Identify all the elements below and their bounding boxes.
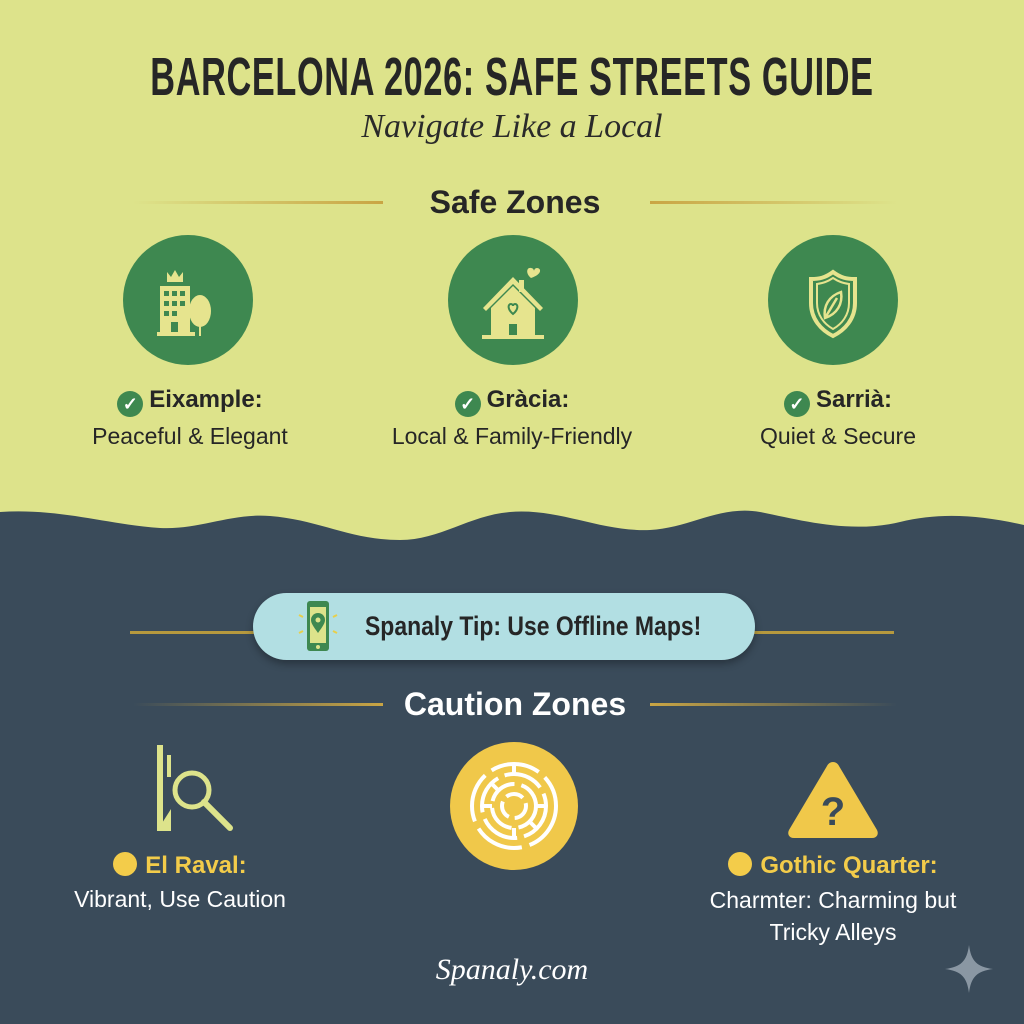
heading: caution zones: Caution Zones [404, 686, 626, 722]
icon: warning [788, 762, 878, 838]
icon: sparkle [946, 946, 992, 992]
safe zone: Sarria: ✓ [789, 394, 805, 414]
heading: safe zones [162, 184, 868, 220]
caution zone: Gothic Quarter: Charmter: Charming but [710, 887, 956, 913]
caution zone: El Raval [74, 852, 286, 912]
safe zone: Eixample: ✓ [123, 394, 138, 414]
safe zone: Eixample: Eixample: [149, 386, 263, 413]
safe zone: Eixample [92, 386, 288, 449]
callout: tip pill [253, 593, 755, 660]
safe zone: Gracia: ✓ [460, 394, 475, 414]
icon: phone map [298, 601, 338, 651]
heading: caution zones [148, 686, 883, 722]
caution zone: Gothic Quarter: Tricky Alleys [770, 919, 896, 945]
caution zone: El Raval: El Raval: [145, 852, 247, 879]
icon: warning: ? [821, 790, 845, 834]
safe zone: Sarria [760, 386, 916, 449]
safe zone: Sarria: Sarrià: [816, 386, 892, 413]
safe zone: Sarria: Quiet & Secure [760, 423, 916, 449]
tip lines [130, 631, 894, 634]
caution zone: Gothic Quarter: Gothic Quarter: [760, 852, 938, 879]
safe zone: Gracia [392, 386, 632, 449]
icon: shield with leaf [768, 235, 898, 365]
caution zone: El Raval: Vibrant, Use Caution [74, 886, 286, 912]
callout: tip pill: Spanaly Tip: Use Offline Maps! [365, 611, 701, 641]
safe zone: Gracia: Gràcia: [487, 386, 569, 413]
heading: safe zones: Safe Zones [430, 184, 600, 220]
subtitle: Navigate Like a Local [361, 108, 663, 145]
caution zone: Gothic Quarter [710, 852, 956, 945]
title: BARCELONA 2026: SAFE STREETS GUIDE [150, 47, 874, 107]
safe zone: Gracia: Local & Family-Friendly [392, 423, 632, 449]
footer brand: Spanaly.com [436, 953, 588, 986]
icon: house with heart [448, 235, 578, 365]
icon: maze [450, 742, 578, 870]
safe zone: Eixample: Peaceful & Elegant [92, 423, 288, 449]
icon: building with tree [123, 235, 253, 365]
icon: magnifier [157, 745, 233, 831]
